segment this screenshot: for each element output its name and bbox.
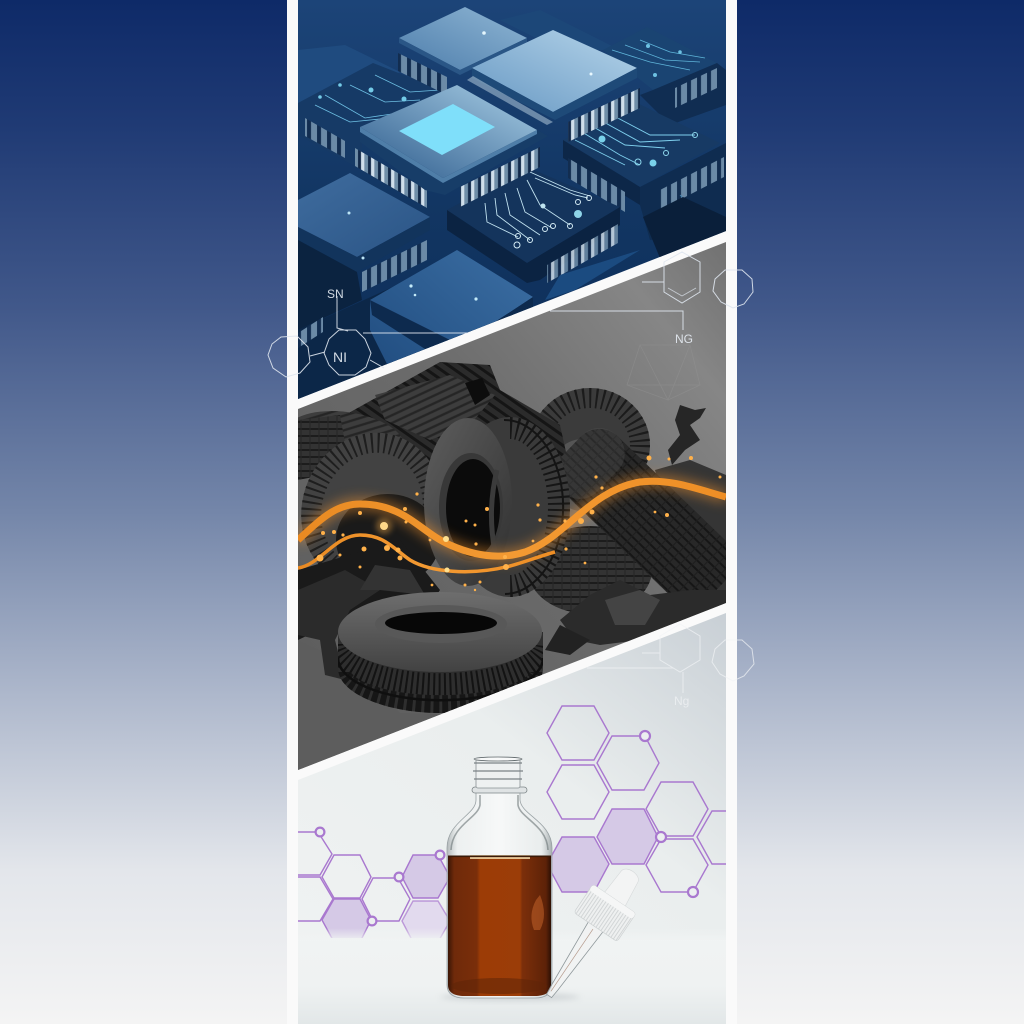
floor shadow: [440, 993, 580, 1001]
left gradient side panel: [0, 0, 287, 1024]
label: NG: NG: [675, 332, 693, 346]
dark circuit chip: right: [563, 103, 726, 240]
left tire: [301, 432, 430, 564]
glass dropper: [546, 868, 639, 998]
glowing die: [399, 104, 495, 155]
amber oil bottle: [447, 757, 552, 998]
dropper tube: [546, 922, 603, 998]
scrap rubber pieces: [298, 565, 726, 680]
table surface: [298, 928, 726, 1024]
panel: oil bottle: [298, 610, 740, 1024]
broken tires at back: [282, 362, 570, 480]
leaning right tire: [562, 428, 726, 593]
chip: bottom: [370, 250, 533, 364]
chip: centre with glowing die: [355, 85, 548, 208]
chip: upper right: [467, 30, 640, 142]
dark debris under wave: [298, 558, 440, 640]
hexagon node circles: [316, 731, 698, 925]
right cluster hexagons: [547, 706, 740, 892]
dark circuit chip: upper left: [298, 63, 440, 158]
torn tire fragment on wall: [668, 405, 706, 465]
panel: microchips: [298, 0, 726, 400]
dark tire interior: [336, 494, 436, 572]
purple hexagon network: [298, 706, 740, 942]
sparks: [316, 456, 722, 591]
tire behind, lower right: [528, 526, 652, 614]
chip: upper centre: [398, 7, 527, 95]
bottle neck: [472, 787, 527, 793]
label: NI: NI: [333, 349, 347, 365]
right gradient side panel: [737, 0, 1024, 1024]
faint triangle texture: [627, 345, 671, 400]
upright centre tire: [424, 417, 570, 597]
back right tire: [530, 388, 650, 511]
molecule overlay: top: [268, 252, 753, 377]
left cluster hexagons: [298, 832, 450, 942]
dropper cap: [574, 884, 636, 942]
chip: far bottom right: [643, 197, 726, 258]
front flat tire: [338, 592, 543, 713]
label: Ng: Ng: [674, 694, 689, 708]
label: SN: SN: [327, 287, 344, 301]
glowing energy waves: [298, 481, 726, 572]
panel: scrap tires: [281, 240, 745, 775]
chip: lower left: [298, 173, 430, 348]
dropper bulb: [604, 868, 639, 906]
dark circuit chip: upper right: [612, 40, 726, 122]
dark circuit chip: lower centre: [447, 167, 620, 283]
molecule overlay: lower right: [587, 624, 754, 708]
